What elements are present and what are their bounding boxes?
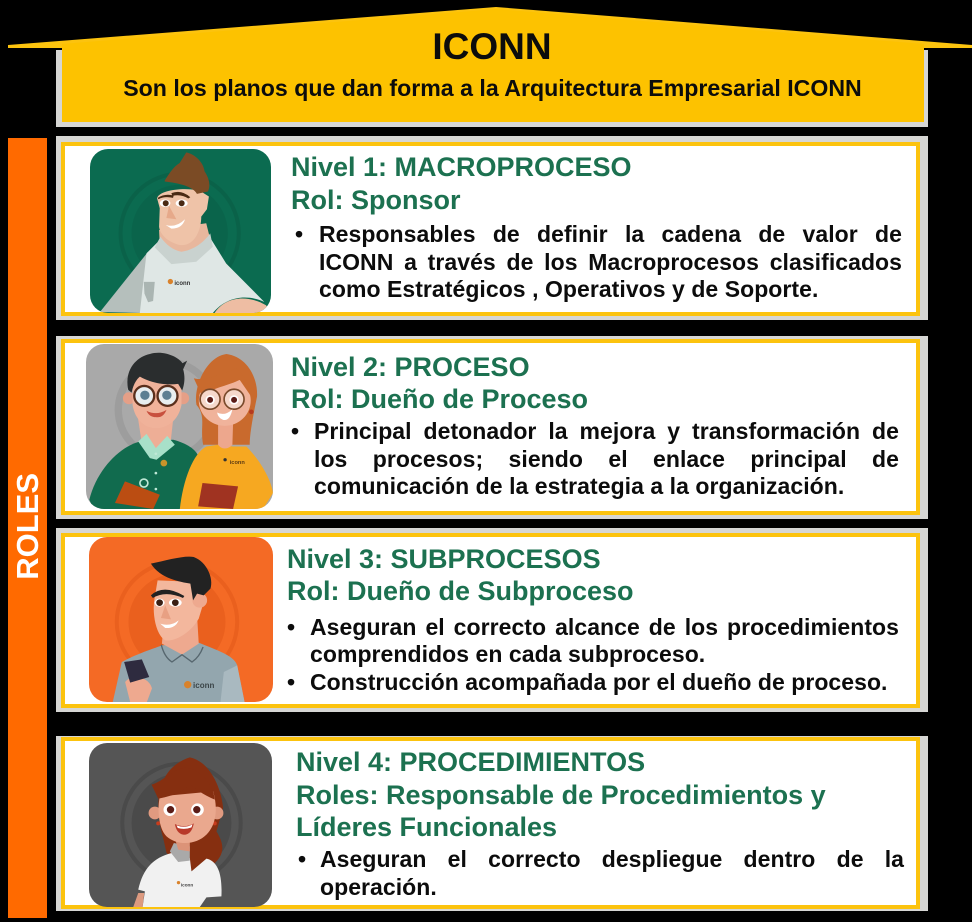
description: Aseguran el correcto alcance de los procedimientos <box>310 614 899 640</box>
header: roof banner <box>8 7 972 127</box>
description: Construcción acompañada por el dueño de proceso. <box>310 669 888 695</box>
avatar: woman on dark grey <box>89 743 272 907</box>
description <box>291 418 899 499</box>
avatar: woman on dark grey: iconn <box>181 882 193 887</box>
panel: nivel 4 <box>56 736 928 911</box>
heading: Nivel 1: MACROPROCESO <box>291 152 632 182</box>
avatar: man and woman on grey <box>86 344 273 509</box>
description <box>287 614 899 695</box>
subtitle: Son los planos que dan forma a la Arquitectura Empresarial ICONN <box>123 75 862 101</box>
heading: Nivel 2: PROCESO <box>291 352 530 382</box>
description: comprendidos en cada subproceso. <box>310 641 705 667</box>
description: como Estratégicos , Operativos y de Soporte. <box>319 276 818 302</box>
role: Rol: Sponsor <box>291 185 460 215</box>
description: • <box>298 846 306 872</box>
description: los procesos; siendo el enlace principal de <box>314 446 899 472</box>
heading: Nivel 3: SUBPROCESOS <box>287 544 601 574</box>
avatar: man and woman on grey: iconn <box>230 460 245 466</box>
description: ICONN a través de los Macroprocesos clasificados <box>319 249 902 275</box>
frame <box>61 339 920 515</box>
role continuation: Líderes Funcionales <box>296 812 557 842</box>
roof shape <box>8 7 972 127</box>
frame <box>61 533 920 708</box>
description: • <box>287 614 295 640</box>
avatar: man with phone on orange <box>89 537 273 702</box>
avatar: sponsor man on green <box>90 149 271 313</box>
description: • <box>291 418 299 444</box>
frame <box>61 142 920 316</box>
description: Aseguran el correcto despliegue dentro de la <box>320 846 904 872</box>
frame <box>61 737 920 909</box>
description: operación. <box>320 874 437 900</box>
description: Principal detonador la mejora y transformación de <box>314 418 899 444</box>
roles label: ROLES <box>10 473 45 579</box>
description: comunicación de la estrategia a la organización. <box>314 473 844 499</box>
side bar: roles <box>8 138 47 918</box>
panel: nivel 2 <box>56 336 928 519</box>
description: • <box>295 221 303 247</box>
panel: nivel 3 <box>56 528 928 712</box>
avatar: man with phone on orange: iconn <box>193 681 215 690</box>
panel: nivel 1 <box>56 136 928 320</box>
description: Responsables de definir la cadena de valor de <box>319 221 902 247</box>
heading: Nivel 4: PROCEDIMIENTOS <box>296 747 645 777</box>
description: • <box>287 669 295 695</box>
role: Rol: Dueño de Proceso <box>291 384 588 414</box>
description <box>295 221 902 302</box>
role: Roles: Responsable de Procedimientos y <box>296 780 826 810</box>
title: ICONN <box>432 26 552 67</box>
avatar: sponsor man on green: iconn <box>174 281 191 287</box>
description <box>298 846 904 900</box>
role: Rol: Dueño de Subproceso <box>287 576 634 606</box>
